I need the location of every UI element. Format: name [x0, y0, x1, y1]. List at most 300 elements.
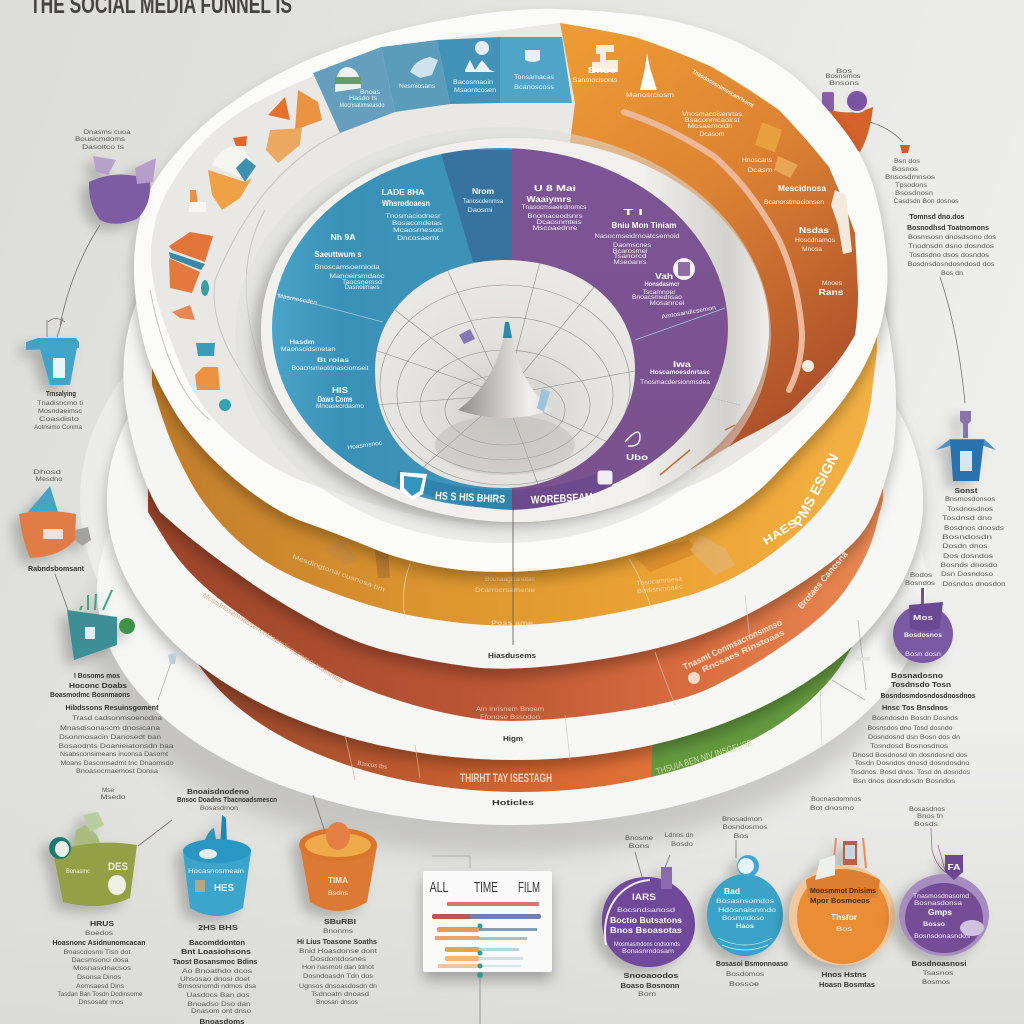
caption: olive bucket top: Mse [102, 787, 114, 794]
caption: blue bucket right: Bosnds dnosdo [940, 562, 998, 569]
caption: orange bucket bottom: Bnosan dnsos [316, 999, 359, 1006]
stem [921, 588, 924, 604]
caption: purple circle right top [905, 572, 936, 587]
badge: purple square [597, 470, 613, 485]
caption: blue bucket [34, 389, 84, 431]
icon: purple circle 1 [602, 867, 695, 967]
connector: purple circle 2 [931, 828, 945, 872]
bucket badge [135, 158, 156, 184]
white sub: Bos [836, 927, 852, 933]
caption: olive bucket: Mosnasidnacsos [73, 965, 132, 972]
details: Tomnsd dno.dos [910, 212, 965, 221]
blue disc text B: Manoeirsmdaoc [330, 274, 384, 280]
caption: orange bucket bottom: Ugnsos dnsoasdosdn dn [299, 983, 377, 990]
base band text [357, 738, 753, 785]
blue disc text E: HIS [332, 386, 349, 395]
line 1: Tnasmosdnasomd [913, 894, 969, 900]
purple disc text B: Daomscnes [613, 243, 651, 249]
icon: small seat [774, 156, 798, 178]
caption: purple circle right: Dnosd Bosdnosd dn dosndosnd dos [852, 752, 968, 759]
yellow band box icon [633, 540, 700, 572]
caption: purple circle 1 top [625, 832, 694, 850]
purple disc text A: Mscoaednre [532, 226, 578, 232]
badge: purple circle [673, 258, 695, 280]
icon: blue bucket left [26, 338, 79, 385]
caption: orange circle bottom [819, 970, 875, 989]
tag text: FA [948, 863, 961, 872]
panel 1 text [340, 90, 385, 109]
purple disc text C: Bnoacsmedrisao [632, 295, 683, 301]
caption: orange bucket bottom: Hi Lius Toasone Soaths [297, 937, 377, 946]
purple disc text E: Ubo [626, 453, 648, 462]
icon: torn strip [831, 190, 852, 254]
icon: chair [755, 122, 782, 152]
heading: HES [214, 883, 234, 894]
purple disc text B: T I [623, 208, 643, 217]
teal badge [49, 837, 71, 859]
caption: blue bucket: Mosndaeimsc [38, 408, 83, 415]
caption: blue bucket right: Dsn Dosndoso [941, 571, 993, 578]
label: third rim: Hoticles [492, 798, 534, 807]
line 3: Bosso [923, 922, 945, 928]
body [53, 843, 137, 906]
details: Bosdnsdosndosndosd dos [908, 261, 995, 268]
orange text block 1: Manosrciosm [626, 93, 674, 99]
caption: purple circle right: Dosndosnd dsn Bosn dos dn [868, 734, 960, 741]
caption: purple circle right: Bosnadosno [891, 671, 944, 680]
yellow band center text: Dcarrocrsamenie [475, 587, 535, 594]
dark blue segment text: Tanoscdenmsa [463, 199, 504, 205]
icon: blue and orange tag [195, 343, 220, 390]
heading: Bad [724, 887, 740, 896]
caption: orange circle top [810, 796, 862, 812]
caption: olive bucket: HRUS [90, 919, 114, 928]
blue disc text D [280, 340, 369, 372]
caption: blue bucket right: Dos dosndos [943, 553, 994, 560]
purple disc text B: Bcarosmei [612, 249, 648, 255]
tier 3: yellow band [152, 250, 877, 625]
blue disc text B: Taocsnemsd [342, 280, 382, 286]
sticks [80, 590, 112, 610]
orange text block 1: Sanmocisonts [572, 78, 618, 84]
icon: purple bucket [89, 156, 156, 224]
text block: right upper [826, 68, 997, 277]
caption: purple circle right: Bosndosdn Bosdn Dosnds [872, 715, 959, 722]
icon: orange circle [789, 838, 895, 965]
body text: Bosdosnos [904, 633, 943, 639]
yellow band short heading: HAES [761, 517, 800, 548]
tier 5: base plate [97, 355, 927, 825]
purple bottom strip [512, 470, 612, 510]
purple disc text C [632, 272, 716, 321]
caption: blue bucket bottom: Bnoadso Dso dan [188, 1001, 251, 1008]
caption: orange bucket bottom: Dosndoasdn Tdn dos [303, 973, 374, 980]
line 4: Mosmasmdons cndsomds [614, 942, 680, 948]
tier 4: red band [148, 300, 883, 721]
red band left text: Mcscdnosemtiassenootcaamlinosenmoi tnassmdu [201, 592, 345, 685]
caption: orange bucket top [33, 469, 63, 483]
purple disc text A: U 8 Mai [534, 184, 576, 193]
cup caption: Bos [836, 68, 853, 75]
caption: blue bucket: Trnsalying [46, 389, 76, 398]
notes: Bsosdnosn [895, 190, 933, 197]
segment 3 [437, 37, 500, 104]
bar 4 [435, 936, 527, 940]
blue disc text A: LADE 8HA [382, 188, 425, 197]
blue disc text B [314, 233, 384, 291]
caption: blue bucket right: Sonst [954, 486, 978, 495]
white arc [605, 880, 650, 945]
icon: purple circle 2 [899, 855, 989, 956]
bowl inner floor [151, 23, 859, 525]
caption: purple circle 2 top [909, 806, 946, 828]
orange text block 6: Mnoes [822, 281, 842, 287]
line 5 [718, 938, 772, 950]
card [423, 871, 552, 972]
orange text block 2: Vnosmacoisenrtas [682, 112, 742, 118]
details: Tnodnsdn dsno dosndos [908, 243, 995, 250]
caption: orange bucket bottom: Dosdontdosnes [310, 956, 367, 963]
orange sweep [560, 23, 858, 470]
body [300, 846, 377, 911]
circle body [602, 877, 695, 967]
line 4: Bosnsdonasndos [914, 934, 970, 940]
segment 2 [381, 40, 450, 112]
line 3: Bosmndoso [722, 916, 765, 922]
purple disc text C: Mosanrcei [650, 301, 684, 307]
caption: blue bucket: Tnadisncmo ti [37, 400, 84, 407]
bar 5 [445, 947, 519, 952]
orange text block 6 [818, 281, 844, 297]
base band left caption: Bascos tbs [357, 760, 388, 771]
caption: olive bucket: Boedos [85, 930, 114, 937]
strings above blue bucket [47, 318, 65, 337]
bar 2 [432, 914, 541, 919]
purple disc text B: Nasocmseidrnoatcsemoid [594, 234, 680, 240]
blue disc text E: Daws Coms [318, 395, 353, 404]
text block: left middle: Trasd cadsonmsoenodna [72, 715, 162, 722]
tag [168, 652, 177, 664]
caption: purple circle 2 top: Bosds [914, 821, 939, 828]
connector: orange to teal [55, 574, 68, 610]
panel: blue outer segments [313, 37, 572, 133]
caption: orange bucket bottom [297, 917, 377, 1006]
purple disc text D: Hoscamoesdnrtasc [650, 370, 711, 376]
caption: orange bucket: Rabndsbomsant [28, 564, 85, 573]
caption: olive bucket: Tasdan Ban Tosdn Dodinsome [58, 991, 143, 998]
cup tag [822, 92, 834, 111]
notes: Bosnos [892, 166, 919, 173]
connector: right notes to blue bucket [940, 277, 965, 403]
blue disc text A: Tnosmaciodnesr [386, 214, 440, 220]
icon: box with white page [208, 136, 256, 210]
caption: purple circle 1 top: Bons [628, 843, 650, 850]
yellow band center text: Poss ame [491, 620, 534, 627]
caption: olive bucket top: Msedo [100, 794, 126, 801]
cup caption [826, 68, 861, 87]
funnel stack [80, 298, 930, 862]
yellow band tab icon [690, 535, 735, 575]
caption: blue bucket right: Dosdn dnos [942, 543, 988, 550]
tier 5: orange band [175, 392, 865, 792]
caption: purple circle 2 bottom [912, 959, 966, 986]
cup caption: Bosnsmos [826, 73, 861, 80]
text block: left middle: Hoconc Doabs [69, 681, 127, 690]
body [19, 511, 76, 558]
heading: IARS [632, 892, 656, 902]
shadow under stack [90, 425, 910, 855]
yellow pin icon [375, 550, 390, 578]
bucket tag [93, 156, 116, 175]
floor tag [459, 329, 475, 344]
body [707, 874, 783, 956]
text block: left middle: Nsabsconsimeans inconsa Dasomt [60, 751, 168, 758]
top ellipse [183, 839, 251, 863]
fin [203, 828, 217, 845]
caption: blue circle top [722, 816, 768, 840]
notes: Bsn dos [894, 158, 921, 165]
blue disc text D: Maonscidsmetan [280, 347, 336, 353]
notes: Tpsodons [895, 182, 928, 189]
text block: left middle: I Bosoms mos [74, 671, 120, 680]
inner [905, 883, 983, 953]
caption: blue bucket bottom top: Bnoaisdnodeno [187, 787, 250, 796]
panel 3 text: Bacosmaoin [453, 80, 493, 86]
purple disc text A [522, 184, 586, 232]
grey handle [75, 527, 91, 546]
caption: purple circle right top: Bodos [910, 572, 933, 579]
text block: left middle: Boasmodmc Bosnmaons [50, 690, 130, 699]
icon: orange and blue stack [169, 190, 213, 293]
patch [195, 880, 205, 892]
caption: purple bucket: Dasoitco ts [82, 144, 125, 151]
caption: orange bucket bottom: Hon nasmoti dan tdnot [302, 964, 374, 971]
caption: olive bucket: Hoasnonc Asidnunomcacan [52, 938, 146, 947]
caption: orange circle top: Bocnasdomnos [811, 796, 862, 803]
cup caption: Bnsons [829, 80, 860, 87]
red band center text: Ffonose Bssodon [480, 714, 540, 721]
caption: blue bucket bottom: Uasdocs Ban dos [186, 992, 250, 999]
orange text block 6: Rans [818, 288, 844, 297]
dark blue segment text: Daosmi [468, 208, 492, 214]
caption: olive bucket: Aomsaesd Dins [76, 983, 125, 990]
notes [885, 158, 959, 205]
red band lower right text: Tnasmt Conmsacronsmnso [681, 617, 784, 672]
panel 1 text: Mocnsatimseasdo [340, 103, 385, 109]
small text: Bonasmc [66, 869, 90, 875]
caption: blue circle top: Bosndosmos [722, 824, 768, 831]
caption: purple circle right: Bosndosmdosndosdnosdnos [880, 691, 976, 700]
caption: orange bucket bottom: Bnonms [323, 928, 354, 935]
cap [909, 602, 943, 631]
icon: teal tag [201, 280, 209, 296]
blue strip text: HS S HIS BHIRS [435, 490, 505, 506]
badge center [55, 841, 69, 857]
caption: blue bucket: Coasdisto [39, 416, 79, 423]
segment divider [273, 293, 725, 340]
caption: blue bucket bottom: 2HS BHS [198, 923, 238, 932]
bar 6 [445, 956, 523, 961]
yellow band left hardware [325, 540, 360, 565]
icon: blue bucket right [936, 411, 996, 481]
icon: cloud [410, 57, 438, 78]
caption: purple circle right: Tosndosd Bosnosdnos [870, 743, 949, 750]
purple disc text A: Tnasocmsaeirdnomcs [522, 205, 586, 211]
blue disc text F: Hoasmsnoc [347, 441, 383, 451]
caption: blue bucket right: Bosndosdn [942, 534, 992, 541]
caption: purple circle 2 bottom: Bosdnoasnosi [912, 959, 966, 968]
purple disc text C: Vah [655, 272, 673, 281]
bar 1 [447, 902, 539, 906]
purple disc text C: Honsdasmcr [644, 282, 680, 288]
blue disc text C: Masrnoscden [277, 294, 317, 306]
badge: blue shield inner [404, 476, 423, 496]
connector arrow [870, 122, 903, 142]
inner ring arcs [150, 133, 370, 490]
caption: purple circle right: Bsn dnos dosndosdn Bosndos [853, 778, 956, 785]
bowl rim [134, 9, 887, 572]
caption: purple circle right: Bosnsdos dno Tosd dosndo [868, 725, 953, 732]
inner [305, 833, 371, 857]
orange text block 1: Bnoe [588, 66, 617, 75]
icon: stacked boxes [592, 45, 618, 72]
connector: orange bucket [313, 795, 325, 832]
line 5: Bonasnmdosam [622, 949, 674, 955]
blue disc text B: Saeuttwum s [314, 250, 362, 259]
cone [458, 328, 552, 418]
panel 1 text: Bnoas [360, 90, 380, 96]
details [907, 212, 997, 277]
heading 1: Moosmmot Dnisims [810, 886, 876, 895]
yellow band right text: Tnsocamroesa [636, 576, 683, 587]
panel: central disc [260, 140, 742, 520]
yellow band center text [475, 576, 536, 627]
top label [199, 849, 217, 859]
icon: blue circle [707, 855, 783, 956]
purple disc text D: Iwa [673, 360, 692, 369]
badge icon [678, 262, 690, 276]
text block: left middle [50, 671, 174, 775]
orange text block 1 [572, 66, 674, 99]
yellow band details [291, 451, 841, 627]
small text: Bosn dosn [905, 652, 941, 658]
icon: teal dot [219, 399, 231, 411]
dark blue segment [440, 150, 512, 262]
bucket body [89, 174, 150, 224]
caption: olive bucket: Bnascdosmi Tisn dot [64, 949, 131, 956]
icon: dome label [335, 77, 361, 84]
orange text block 5 [795, 226, 835, 253]
blue disc text A: Mcaosrnesoci [393, 228, 443, 234]
outer soft plate [80, 220, 930, 780]
icon: purple swirl [625, 432, 640, 446]
blob [960, 920, 984, 936]
yellow band right text [636, 576, 684, 595]
line 4: Haos [736, 924, 755, 930]
body [67, 610, 117, 660]
orange text block 3: Dcasm [748, 168, 772, 174]
caption: purple circle right top: Bosndos [905, 580, 936, 587]
icon: tower cap [475, 41, 489, 55]
caption: blue bucket bottom: Taost Bosansmoc Bdins [172, 957, 258, 966]
caption: blue bucket: Aotnsimo Conma [34, 424, 82, 431]
orange text block 3: Hnoscans [742, 158, 772, 164]
caption: blue circle bottom [716, 959, 789, 988]
heading: TIMA [328, 876, 348, 885]
caption: blue bucket bottom: Dnasom ont dnso [191, 1008, 251, 1015]
caption: purple circle 1 bottom: Snooaoodos [624, 971, 678, 980]
blue disc text B: Bnoscamsoernioda [314, 265, 380, 271]
blue disc text A [382, 188, 443, 242]
icon: small orange figure [172, 305, 195, 320]
purple strip text: WOREBSEAM [531, 491, 593, 507]
rim [26, 338, 79, 350]
purple disc text A: Waaiymrs [526, 195, 572, 204]
sub: Bsdns [328, 891, 348, 897]
cup body [822, 107, 873, 152]
header: film: FILM [518, 879, 540, 896]
orange text block 2 [682, 112, 742, 138]
tag [856, 657, 870, 661]
caption: olive bucket: Dacsmsonci dosa [72, 957, 129, 964]
white heading: Thsfor [831, 913, 857, 922]
caption: orange circle bottom: Hnos Hstns [822, 970, 866, 979]
caption: olive bucket [52, 919, 146, 1006]
badge: blue shield [400, 472, 427, 500]
purple disc text C: Tscamnoer [642, 290, 676, 296]
top small circle inner [738, 858, 754, 874]
caption: purple circle 1 bottom: Bom [638, 991, 657, 998]
caption: purple circle 1 top: Bnosme [625, 835, 653, 842]
floor grid [375, 262, 640, 490]
cone tip [503, 322, 512, 338]
panel 1 text: Hasdo ts [349, 96, 377, 102]
stack labels [488, 651, 536, 807]
phone tag [661, 867, 672, 889]
details: Bosnodhsd Toatnomons [907, 223, 989, 232]
purple disc text B: Tsanorcd [614, 254, 646, 260]
caption: blue bucket right [940, 486, 1006, 588]
chart pointer line [479, 978, 481, 1024]
orange text block 5: Hoscdnamos [795, 238, 835, 244]
orange text block 4 [764, 184, 827, 206]
icon: teal bucket [67, 590, 135, 660]
yellow band left caption: Mesdingtonai cusnosa tim [291, 554, 386, 594]
label: first rim: Hiasdusems [488, 651, 536, 660]
caption: orange bucket top: Dhosd [33, 469, 61, 476]
disc body purple [512, 148, 728, 490]
icon: dome [335, 67, 362, 92]
body [183, 852, 251, 916]
details: Bos dn [941, 270, 963, 277]
icon: cup [525, 50, 540, 62]
segment 4 [500, 37, 572, 103]
caption: purple circle 2 bottom: Tsasnos [922, 970, 954, 977]
tag [945, 855, 963, 880]
blue disc text A: Dncosaemt [397, 236, 439, 242]
caption: orange bucket top: Mesdno [36, 476, 63, 483]
vertical center line [512, 488, 514, 645]
caption: blue bucket bottom: Bacomddonton [189, 938, 245, 947]
heading: Mos [913, 615, 933, 622]
purple disc text B: Mseoanrs [614, 260, 646, 266]
caption: blue circle top: Bos [734, 833, 749, 840]
caption: blue bucket right: Bnsmosdonsos [945, 496, 996, 503]
segment 1 [313, 47, 395, 133]
icon: lamp [802, 360, 814, 372]
tier 5: green band [651, 646, 852, 777]
icon: orange bucket bottom [299, 822, 377, 911]
